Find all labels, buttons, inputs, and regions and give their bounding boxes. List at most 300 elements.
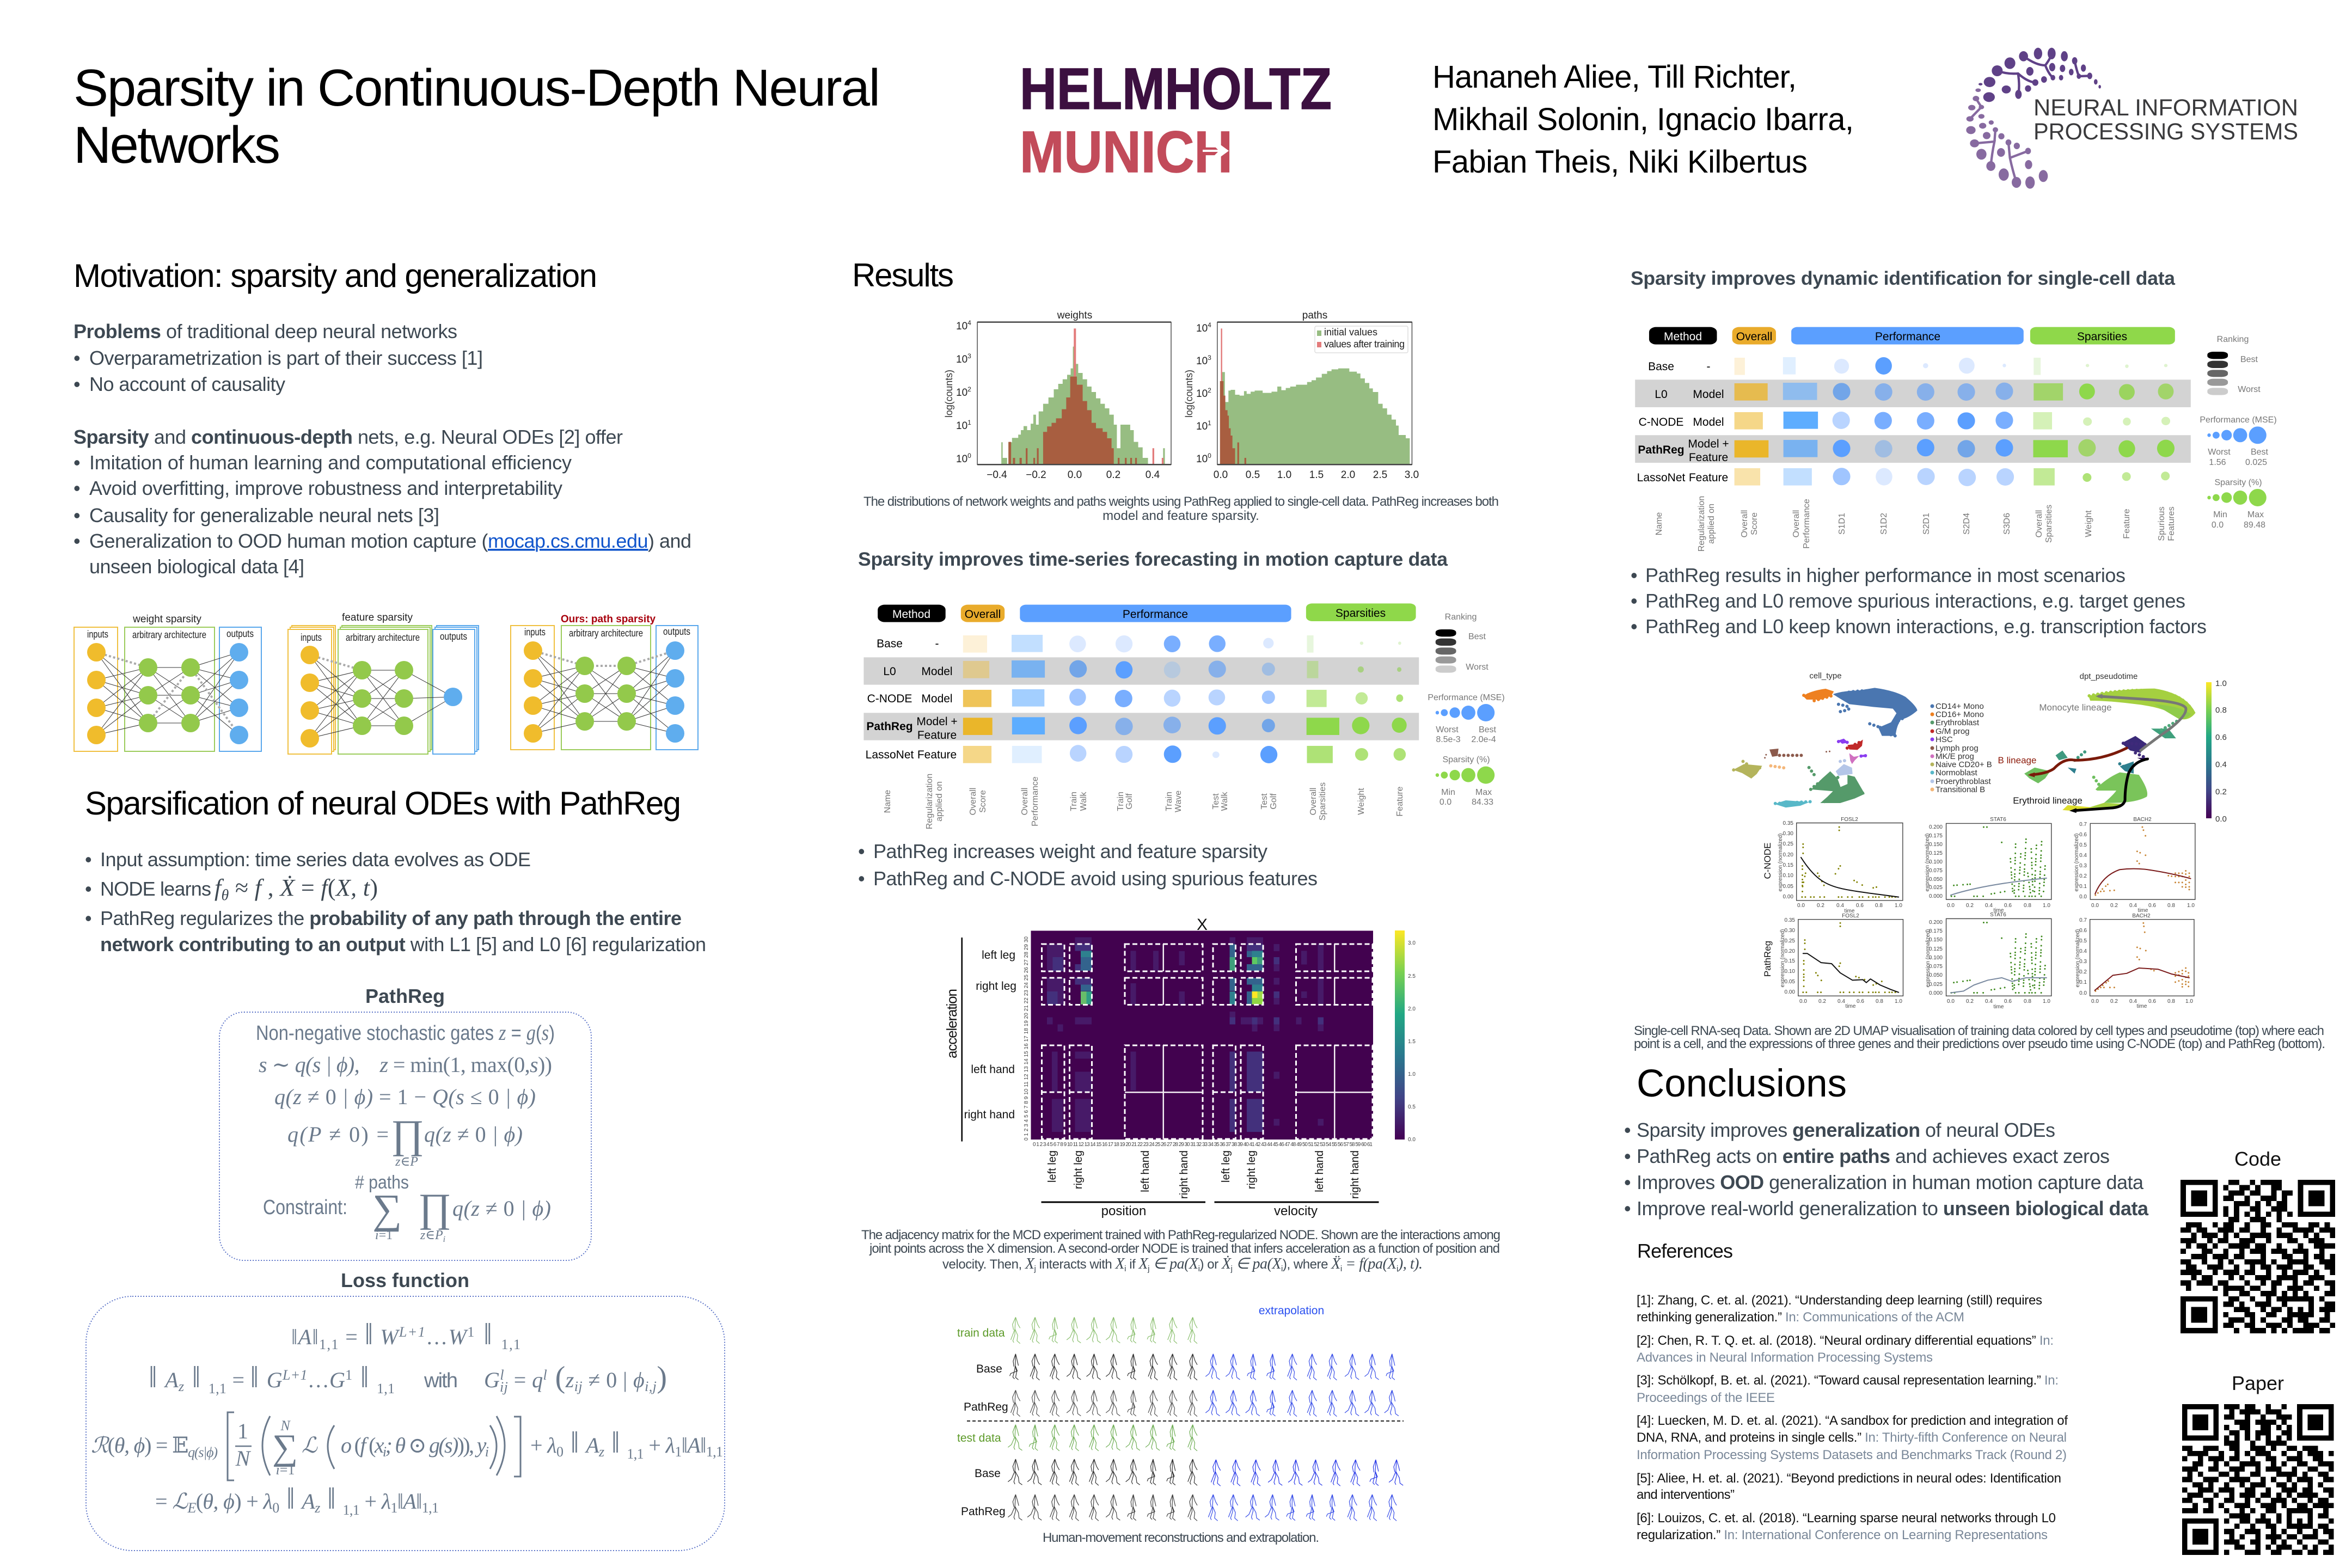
chart: UMAP pseudotime xyxy=(1998,672,2227,824)
table column labels: Overall xyxy=(969,788,978,815)
text block: problems: No account of causality xyxy=(89,373,285,395)
equation: objective: ‖ xyxy=(563,1426,586,1460)
x tick labels: −0.4 xyxy=(987,469,1007,481)
equation: Az norm: … xyxy=(308,1368,329,1392)
y tick labels: 0.25 xyxy=(1783,841,1793,847)
heading: references: References xyxy=(1637,1240,1733,1262)
heatmap labels: right hand xyxy=(964,1108,1015,1121)
legend: values after training xyxy=(1324,339,1405,350)
table legend: Best xyxy=(1479,725,1497,734)
equation: objective: N xyxy=(280,1418,291,1434)
diagram: weight sparsity network: arbitrary architecture xyxy=(132,629,206,640)
reference list: [2]: Chen, R. T. Q. et. al. (2018). “Neural ordinary differential equations” In: xyxy=(1637,1333,2054,1348)
diagram: path sparsity network: Ours: path sparsity xyxy=(561,614,656,625)
x tick labels: 0.6 xyxy=(2004,999,2012,1004)
QR code: Code: Code xyxy=(2234,1148,2281,1170)
equation: objective: i=1 xyxy=(276,1462,295,1478)
table legend: 0.0 xyxy=(2212,520,2224,530)
x tick labels: 0.2 xyxy=(1106,469,1120,481)
equation: objective: A xyxy=(586,1433,599,1457)
table column labels: Test xyxy=(1211,793,1221,810)
y tick labels: 0.050 xyxy=(1929,972,1943,978)
table row labels: Base xyxy=(1648,360,1674,373)
logo: Helmholtz Munich: HELMHOLTZ xyxy=(1020,56,1332,121)
bullet list: PathReg xyxy=(85,848,706,955)
reference list: regularization.” In: International Conference on Learning Representations xyxy=(1637,1528,2048,1542)
y tick labels: 0.15 xyxy=(1785,958,1795,964)
heatmap labels: velocity xyxy=(1274,1204,1318,1218)
text block: continuous-depth nets: • xyxy=(74,451,81,474)
equation: A norm: = xyxy=(339,1325,364,1349)
lineage labels: B lineage xyxy=(1998,755,2036,765)
equation: objective: A‖ xyxy=(687,1433,706,1457)
cloud dots xyxy=(1734,691,1908,804)
table column labels xyxy=(1655,496,2176,552)
y tick labels: 0.2 xyxy=(2079,969,2087,975)
y tick labels: 10 xyxy=(956,354,967,365)
x tick labels: 0.8 xyxy=(2024,999,2031,1004)
equation: expanded objective: ‖ xyxy=(397,1489,403,1514)
heading: loss function: Loss function xyxy=(341,1269,469,1291)
heatmap labels: left hand xyxy=(1314,1150,1326,1192)
diagram: weight sparsity network: weight sparsity xyxy=(132,614,201,625)
y tick labels: 0.00 xyxy=(1785,989,1795,995)
row labels: extrapolation xyxy=(1259,1304,1324,1317)
colorbar: 0.0 xyxy=(1408,1137,1416,1143)
bullet list: conclusions: • xyxy=(1624,1145,1631,1167)
table row labels: C-NODE xyxy=(867,693,912,705)
heatmap labels: right hand xyxy=(1178,1150,1190,1199)
x tick labels: 1.0 xyxy=(2185,999,2193,1004)
x tick labels: 0.0 xyxy=(2091,999,2099,1004)
y tick labels: 3 xyxy=(967,352,971,360)
bullets: single-cell findings: • xyxy=(1631,564,1638,586)
x tick labels: 0.0 xyxy=(1799,999,1807,1004)
equation: Az norm: ≠ 0 | xyxy=(583,1368,633,1392)
bullet list: conclusions: Sparsity improves generalization of neural ODEs xyxy=(1637,1119,2055,1141)
heatmap tick labels: 0 1 2 3 4 5 6 7 8 9 10 11 12 13 14 15 16 17 18 19 20 21 22 23 24 25 26 27 28 29 30 xyxy=(1024,936,1030,1141)
x tick labels: 0.6 xyxy=(2148,999,2156,1004)
caption: heatmap: Ẋ xyxy=(1221,1255,1232,1272)
table row labels: L0 xyxy=(1655,388,1668,401)
plot shapes xyxy=(1797,823,2195,996)
equation: constraint: Constraint: xyxy=(263,1196,347,1219)
caption: heatmap: X xyxy=(1115,1255,1125,1272)
diagram: feature sparsity network: arbitrary architecture xyxy=(346,632,420,643)
table legend: Worst xyxy=(1466,663,1489,672)
table row labels: Model xyxy=(921,665,953,678)
reference list: [1]: Zhang, C. et. al. (2021). “Understanding deep learning (still) requires xyxy=(1637,1293,2042,1308)
bullet list: conclusions: Improves OOD generalization in human motion capture data xyxy=(1637,1171,2144,1193)
table column labels: S2D4 xyxy=(1962,513,1971,535)
equation: objective: 0 xyxy=(556,1444,564,1460)
table legend: Sparsity (%) xyxy=(2214,478,2262,487)
table legend: Ranking xyxy=(2217,335,2249,344)
equation: objective: ℛ(θ, ϕ) = 𝔼 xyxy=(91,1433,188,1457)
QR code: Paper: Paper xyxy=(2232,1372,2284,1394)
lineage labels: Monocyte lineage xyxy=(2039,702,2112,713)
heatmap labels xyxy=(944,916,1361,1218)
table column labels: Spurious xyxy=(2157,506,2166,541)
y tick labels xyxy=(944,319,1211,465)
logo: Neural Information Processing Systems: NEURAL INFORMATION xyxy=(2033,95,2298,121)
histogram shapes xyxy=(977,322,1412,464)
y tick labels: 0.0 xyxy=(2079,894,2087,900)
table legend: Min xyxy=(2213,510,2227,519)
row labels: PathReg xyxy=(1762,941,1773,977)
QR code: Code xyxy=(2180,1148,2335,1333)
bullets: single-cell findings: PathReg and L0 remove spurious interactions, e.g. target genes xyxy=(1645,590,2185,612)
y tick labels: 0.050 xyxy=(1929,877,1943,883)
table row labels: C-NODE xyxy=(1639,416,1683,428)
table shapes xyxy=(1635,327,2267,506)
equation: gate probability: q(z ≠ 0 | ϕ) = 1 − Q(s ≤ 0 | ϕ) xyxy=(274,1085,536,1109)
y tick labels: 0.05 xyxy=(1785,979,1795,985)
caption: heatmap: ), where xyxy=(1283,1257,1332,1272)
diagram: weight sparsity network xyxy=(74,614,261,751)
diagram: feature sparsity network: inputs xyxy=(301,632,322,643)
bullets: single-cell findings xyxy=(1631,564,2207,638)
table column labels: Score xyxy=(1750,512,1759,535)
equation: objective: ‖ xyxy=(604,1426,627,1460)
equation: constraint: ∏ xyxy=(418,1186,451,1230)
equation: A norm: L+1 xyxy=(399,1324,425,1340)
equation: objective: + xyxy=(644,1433,666,1457)
x tick labels: 0.2 xyxy=(1818,999,1826,1004)
panel: motivation xyxy=(74,258,691,578)
text block: problems: Problems of traditional deep neural networks xyxy=(74,320,457,342)
panel: PathReg equations xyxy=(219,985,591,1260)
equation: A norm: 1 xyxy=(467,1324,474,1340)
colorbar: pseudotime: 0.4 xyxy=(2215,760,2227,769)
y tick labels: 0.3 xyxy=(2079,959,2087,965)
equation: A norm: 1,1 xyxy=(319,1337,338,1352)
equation: path probability: q(z ≠ 0 | ϕ) xyxy=(424,1122,523,1147)
x tick labels: 0.4 xyxy=(1985,903,1993,909)
equation: objective: 1,1 xyxy=(706,1444,723,1460)
plot titles and axis labels: FOSL2 xyxy=(1841,817,1858,823)
bullets: motion capture findings xyxy=(858,840,1318,890)
equation: Az norm: ‖ xyxy=(352,1361,377,1394)
heatmap labels: right leg xyxy=(1246,1150,1258,1189)
panel: references xyxy=(1637,1240,2068,1542)
y tick labels: 0.15 xyxy=(1783,862,1793,868)
y tick labels: 0.200 xyxy=(1929,920,1943,926)
chart: single-cell results table xyxy=(1635,327,2277,552)
equation: Az norm: ) xyxy=(657,1361,667,1394)
y tick labels: 3 xyxy=(1208,354,1211,362)
x tick labels: 1.0 xyxy=(2043,903,2050,909)
reference list: DNA, RNA, and proteins in single cells.” In: Thirty-fifth Conference on Neural xyxy=(1637,1430,2067,1445)
legend: cell types xyxy=(1931,702,1992,794)
cloud blobs xyxy=(1733,688,1918,807)
caption: heatmap: interacts with xyxy=(1036,1257,1116,1272)
table column labels: Sparsities xyxy=(1318,782,1327,820)
x tick labels: 0.0 xyxy=(2091,903,2099,909)
caption: heatmap: j xyxy=(1034,1264,1036,1273)
heatmap labels: right hand xyxy=(1349,1150,1361,1199)
caption: heatmap: ), t). xyxy=(1397,1255,1423,1272)
bullets: single-cell findings: PathReg and L0 keep known interactions, e.g. transcription factors xyxy=(1645,615,2207,638)
x tick labels: 3.0 xyxy=(1405,469,1419,481)
x tick labels: 0.4 xyxy=(1837,999,1845,1004)
bullet list: conclusions xyxy=(1624,1119,2149,1220)
caption: heatmap: velocity. Then, X xyxy=(942,1255,1034,1272)
bullet list: PathReg: • xyxy=(85,878,92,900)
plot titles and axis labels: expression (normalized) xyxy=(2074,834,2080,891)
table legend: Performance (MSE) xyxy=(1428,693,1505,702)
table column labels: Overall xyxy=(1792,510,1801,537)
plot titles and axis labels: time xyxy=(2137,1003,2147,1009)
y tick labels: 0.6 xyxy=(2079,928,2087,934)
text block: continuous-depth nets: Generalization to OOD human motion capture (mocap.cs.cmu.edu) and xyxy=(89,530,691,552)
equation: Az norm: ‖ xyxy=(184,1361,209,1394)
table row labels xyxy=(866,638,958,761)
row labels: PathReg xyxy=(961,1505,1006,1518)
caption: human movement: Human-movement reconstructions and extrapolation. xyxy=(1043,1530,1319,1545)
x tick labels: 0.2 xyxy=(2110,903,2118,909)
table column labels: Overall xyxy=(1309,788,1318,815)
reference list: and interventions” xyxy=(1637,1487,1735,1502)
table column labels: Wave xyxy=(1174,791,1183,812)
colorbar xyxy=(1395,930,1416,1143)
equation: path probability xyxy=(287,1112,523,1169)
bullet list: PathReg: θ xyxy=(222,887,229,904)
diagram: path sparsity network: arbitrary architecture xyxy=(569,628,643,639)
equation: Az norm: 1,1 xyxy=(377,1381,395,1396)
table column labels: Train xyxy=(1069,792,1079,811)
x tick labels: 0.2 xyxy=(1817,903,1824,909)
equation: Az norm: L+1 xyxy=(282,1367,307,1383)
equation: Az norm: ij xyxy=(500,1379,508,1395)
caption: heatmap: i xyxy=(1124,1264,1126,1273)
legend: cell types: CD14+ Mono xyxy=(1935,702,1984,711)
x tick labels: 1.0 xyxy=(1895,999,1902,1004)
authors xyxy=(1432,59,1854,180)
table legend: 0.0 xyxy=(1440,798,1451,807)
y tick labels: 0.3 xyxy=(2079,863,2087,869)
y tick labels: 0.10 xyxy=(1785,969,1795,975)
diagram: feature sparsity network xyxy=(288,612,479,754)
equation: path probability: ∏ xyxy=(391,1112,424,1157)
plot titles and axis labels: expression (normalized) xyxy=(1778,834,1784,891)
table legend: 2.0e-4 xyxy=(1471,735,1496,744)
equation: Az norm: G xyxy=(329,1368,345,1392)
table legend: 1.56 xyxy=(2209,458,2226,467)
text block: problems xyxy=(74,320,483,395)
bullets: motion capture findings: PathReg and C-NODE avoid using spurious features xyxy=(873,867,1318,890)
x tick labels: 0.0 xyxy=(1947,903,1955,909)
table row labels xyxy=(1637,360,1729,484)
caption: heatmap: The adjacency matrix for the MCD experiment trained with PathReg-regularized NODE. Shown are the interactions among xyxy=(861,1228,1500,1242)
panel: sparsification with PathReg xyxy=(85,785,706,955)
y tick labels: 10 xyxy=(1196,388,1208,400)
equation: Az norm: = xyxy=(508,1368,532,1392)
table column labels: Overall xyxy=(2035,510,2044,537)
x tick labels: 0.0 xyxy=(1214,469,1228,481)
legend: cell types: HSC xyxy=(1935,735,1953,744)
x tick labels: 0.2 xyxy=(1966,903,1974,909)
equation: expanded objective: 1,1 xyxy=(422,1500,439,1516)
table row labels: - xyxy=(1706,360,1711,373)
bullets: motion capture findings: PathReg increases weight and feature sparsity xyxy=(873,840,1267,862)
plot titles and axis labels: STAT6 xyxy=(1990,912,2006,918)
y tick labels: 10 xyxy=(956,321,967,332)
x tick labels: 0.0 xyxy=(1797,903,1805,909)
bullets: motion capture findings: • xyxy=(858,867,865,890)
caption: heatmap: i xyxy=(1396,1264,1398,1273)
x tick labels: 2.0 xyxy=(1341,469,1355,481)
y tick labels: 0.7 xyxy=(2079,822,2087,828)
equation: constraint: i xyxy=(443,1235,445,1244)
legend: cell types: Normoblast xyxy=(1935,768,1978,777)
table shapes xyxy=(863,603,1494,784)
table column labels: Golf xyxy=(1269,793,1278,810)
legend: initial values xyxy=(1324,327,1377,338)
equation: A norm: ‖ W xyxy=(365,1318,399,1351)
x tick labels: 0.2 xyxy=(1966,999,1974,1004)
y tick labels: 0.025 xyxy=(1929,885,1943,891)
table headers: Performance xyxy=(1875,330,1940,343)
plot titles and axis labels: expression (normalized) xyxy=(2075,929,2081,987)
equation: Az norm: q xyxy=(532,1368,543,1392)
y tick labels: log(counts) xyxy=(1184,370,1195,418)
table column labels: Name xyxy=(1655,512,1664,535)
table column labels: Performance xyxy=(1031,776,1040,826)
x tick labels: 0.8 xyxy=(2167,903,2175,909)
text block: continuous-depth nets: • xyxy=(74,504,81,526)
chart: UMAP cell types xyxy=(1733,671,1992,807)
equation: sampling: s ∼ q(s | ϕ), z = min(1, max(0,s)) xyxy=(259,1052,552,1077)
y tick labels: log(counts) xyxy=(944,370,954,418)
y tick labels: 0.20 xyxy=(1783,852,1793,858)
plot titles and axis labels: time xyxy=(1994,908,2004,914)
y tick labels: 0.175 xyxy=(1929,833,1943,839)
plot titles and axis labels: FOSL2 xyxy=(1842,913,1859,919)
caption: heatmap: i xyxy=(1198,1264,1200,1273)
y tick labels: 0.125 xyxy=(1929,946,1943,952)
table legend: Max xyxy=(1475,788,1492,797)
chart: adjacency heatmap xyxy=(944,916,1416,1218)
equation: Az norm: ij xyxy=(574,1379,583,1394)
table legend: Ranking xyxy=(1445,612,1477,622)
equation: Az norm xyxy=(149,1361,667,1396)
x tick labels: 2.5 xyxy=(1373,469,1387,481)
y tick labels: 0.1 xyxy=(2079,884,2087,890)
equation: constraint: i=1 xyxy=(375,1228,393,1242)
table column labels: applied on xyxy=(1707,504,1716,544)
x tick labels: 1.5 xyxy=(1309,469,1324,481)
y tick labels: 0.100 xyxy=(1929,859,1943,865)
equation: objective: i xyxy=(383,1444,387,1460)
equation: Az norm: ϕ xyxy=(633,1368,645,1392)
diagram: path sparsity network: inputs xyxy=(524,627,546,638)
equation: objective: q(s|ϕ) xyxy=(188,1444,218,1460)
equation: constraint: ∑ xyxy=(372,1186,402,1232)
x tick labels xyxy=(1797,903,2195,1004)
colorbar: 1.0 xyxy=(1408,1071,1416,1077)
table column labels: Name xyxy=(883,790,892,813)
table legend xyxy=(1428,612,1505,807)
heatmap labels: left hand xyxy=(1140,1150,1152,1192)
colorbar: 3.0 xyxy=(1408,940,1416,946)
diagram: weight sparsity network: outputs xyxy=(226,628,254,639)
colorbar: pseudotime: 0.6 xyxy=(2215,733,2227,742)
x tick labels: 0.8 xyxy=(2167,999,2175,1004)
table row labels: Model xyxy=(921,693,953,705)
equation: objective: + λ xyxy=(530,1433,557,1457)
equation: objective: o (f (x xyxy=(341,1433,384,1457)
chart: UMAP cell types: cell_type xyxy=(1809,671,1842,681)
table headers: Overall xyxy=(965,608,1001,621)
heading: results: Results xyxy=(852,257,954,293)
equation: constraint: q(z ≠ 0 | ϕ) xyxy=(452,1196,551,1221)
x tick labels xyxy=(987,469,1419,481)
table column labels: Feature xyxy=(1395,786,1405,817)
y tick labels: 0.175 xyxy=(1929,928,1943,934)
equation: expanded objective: 1 xyxy=(390,1500,397,1516)
equation: Az norm: i,j xyxy=(645,1379,657,1394)
bullet list: PathReg: ≈ xyxy=(229,874,254,901)
text block: problems: • xyxy=(74,373,81,395)
bullet list: PathReg: network contributing to an output with L1 [5] and L0 [6] regularization xyxy=(100,933,706,955)
x tick labels: 1.0 xyxy=(1895,903,1902,909)
x tick labels: 1.0 xyxy=(1277,469,1291,481)
caption: heatmap: i xyxy=(1281,1264,1283,1273)
equation: stochastic gates: Non-negative stochastic gates z = g(s) xyxy=(256,1020,555,1045)
caption: heatmap: ) or xyxy=(1200,1257,1222,1272)
equation: expanded objective: z xyxy=(314,1500,320,1516)
table row labels: Base xyxy=(877,638,903,650)
table headers: Method xyxy=(892,608,930,621)
table column labels: S3D6 xyxy=(2002,513,2012,535)
table row labels: Model + xyxy=(1688,438,1729,450)
equation: Az norm: 1 xyxy=(345,1367,352,1383)
y tick labels: 0.025 xyxy=(1929,982,1943,988)
text block: continuous-depth nets xyxy=(74,426,691,578)
y tick labels: 0.2 xyxy=(2079,873,2087,879)
table row labels: PathReg xyxy=(866,720,913,733)
row labels: C-NODE xyxy=(1762,842,1773,879)
heatmap labels: right leg xyxy=(976,980,1016,993)
table column labels: Features xyxy=(2167,506,2176,541)
table column labels: Golf xyxy=(1125,793,1134,810)
reference list: [5]: Aliee, H. et. al. (2021). “Beyond predictions in neural odes: Identification xyxy=(1637,1471,2061,1486)
y tick labels: 0.10 xyxy=(1783,873,1793,879)
table row labels: Feature xyxy=(917,729,957,742)
table headers: Sparsities xyxy=(1336,607,1386,620)
equation: A norm: ‖A‖ xyxy=(291,1325,318,1349)
x tick labels: 0.4 xyxy=(1836,903,1844,909)
equation: Az norm: ‖ G xyxy=(250,1361,283,1394)
equation: expanded objective: ( xyxy=(196,1489,203,1514)
equation: Az norm: l xyxy=(543,1367,547,1383)
equation: constraint xyxy=(263,1172,551,1244)
chart: human movement stick figures xyxy=(957,1304,1404,1545)
bullets: single-cell findings: • xyxy=(1631,615,1638,638)
table column labels: Overall xyxy=(1020,788,1030,815)
equation: expanded objective: A xyxy=(302,1489,315,1514)
heatmap cells xyxy=(962,930,1379,1202)
table column labels xyxy=(883,774,1405,829)
y tick labels: 0.150 xyxy=(1929,842,1943,848)
equation: objective: N xyxy=(235,1446,252,1471)
y tick labels: 0.0 xyxy=(2079,990,2087,996)
heading: conclusions: Conclusions xyxy=(1637,1062,1847,1105)
equation: expanded objective: ‖ xyxy=(320,1482,343,1516)
y tick labels: 0.6 xyxy=(2079,832,2087,838)
plot titles and axis labels: time xyxy=(1994,1004,2004,1010)
